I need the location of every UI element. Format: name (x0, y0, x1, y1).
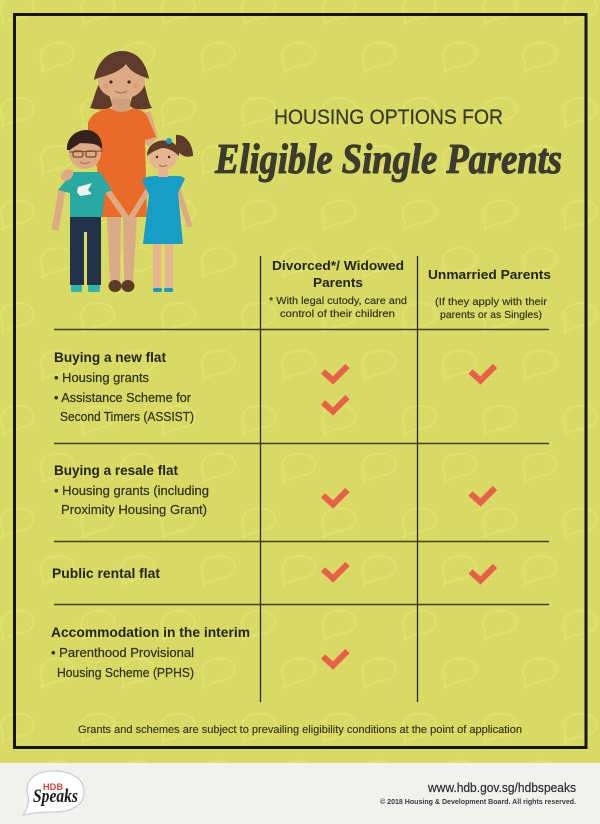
column header: unmarried parents: (If they apply with their (435, 296, 548, 308)
row: buying a resale flat: • Housing grants (including (54, 484, 209, 498)
illustration: family of mother, son and daughter (55, 51, 193, 292)
row: buying a resale flat: Buying a resale flat (54, 462, 178, 478)
column header: unmarried parents: Unmarried Parents (428, 267, 551, 282)
check marks: unmarried column (470, 366, 495, 580)
row: buying a resale flat (54, 462, 209, 517)
column header: unmarried parents (428, 267, 551, 321)
row: buying a resale flat: Proximity Housing Grant) (61, 503, 207, 517)
row: accommodation in the interim: • Parenthood Provisional (51, 646, 194, 660)
check marks: divorced or widowed column (323, 366, 348, 666)
column header: divorced or widowed parents: Parents (313, 275, 363, 290)
boy (55, 130, 128, 292)
girl (129, 135, 193, 292)
row: accommodation in the interim: Housing Scheme (PPHS) (57, 666, 194, 680)
logo: HDB Speaks speech bubble (23, 771, 84, 815)
row: buying a new flat: Second Timers (ASSIST) (60, 410, 194, 424)
heading: Housing options for: HOUSING OPTIONS FOR (274, 106, 503, 129)
row: buying a new flat: • Housing grants (54, 371, 149, 385)
column header: divorced or widowed parents (269, 258, 407, 320)
footnote: Grants and schemes are subject to prevailing eligibility conditions at the point of application (78, 724, 522, 736)
table grid (54, 256, 549, 702)
column header: divorced or widowed parents: * With legal cutody, care and (269, 295, 407, 307)
mother (88, 51, 156, 292)
row: accommodation in the interim (51, 624, 250, 680)
row: accommodation in the interim: Accommodation in the interim (51, 624, 250, 640)
row: buying a new flat: Buying a new flat (54, 349, 166, 365)
column header: divorced or widowed parents: Divorced*/ Widowed (272, 258, 404, 273)
row: public rental flat: Public rental flat (52, 565, 160, 581)
column header: unmarried parents: parents or as Singles) (440, 309, 542, 321)
footer band (0, 763, 600, 824)
website address: www.hdb.gov.sg/hdbspeaks (427, 780, 576, 795)
copyright: © 2018 Housing & Development Board. All rights reserved. (380, 797, 576, 806)
row: buying a new flat (54, 349, 194, 424)
column header: divorced or widowed parents: control of their children (280, 308, 395, 320)
logo: HDB Speaks speech bubble: HDB (43, 782, 63, 793)
row: buying a new flat: • Assistance Scheme for (54, 391, 191, 405)
logo: HDB Speaks speech bubble: Speaks (33, 786, 78, 807)
